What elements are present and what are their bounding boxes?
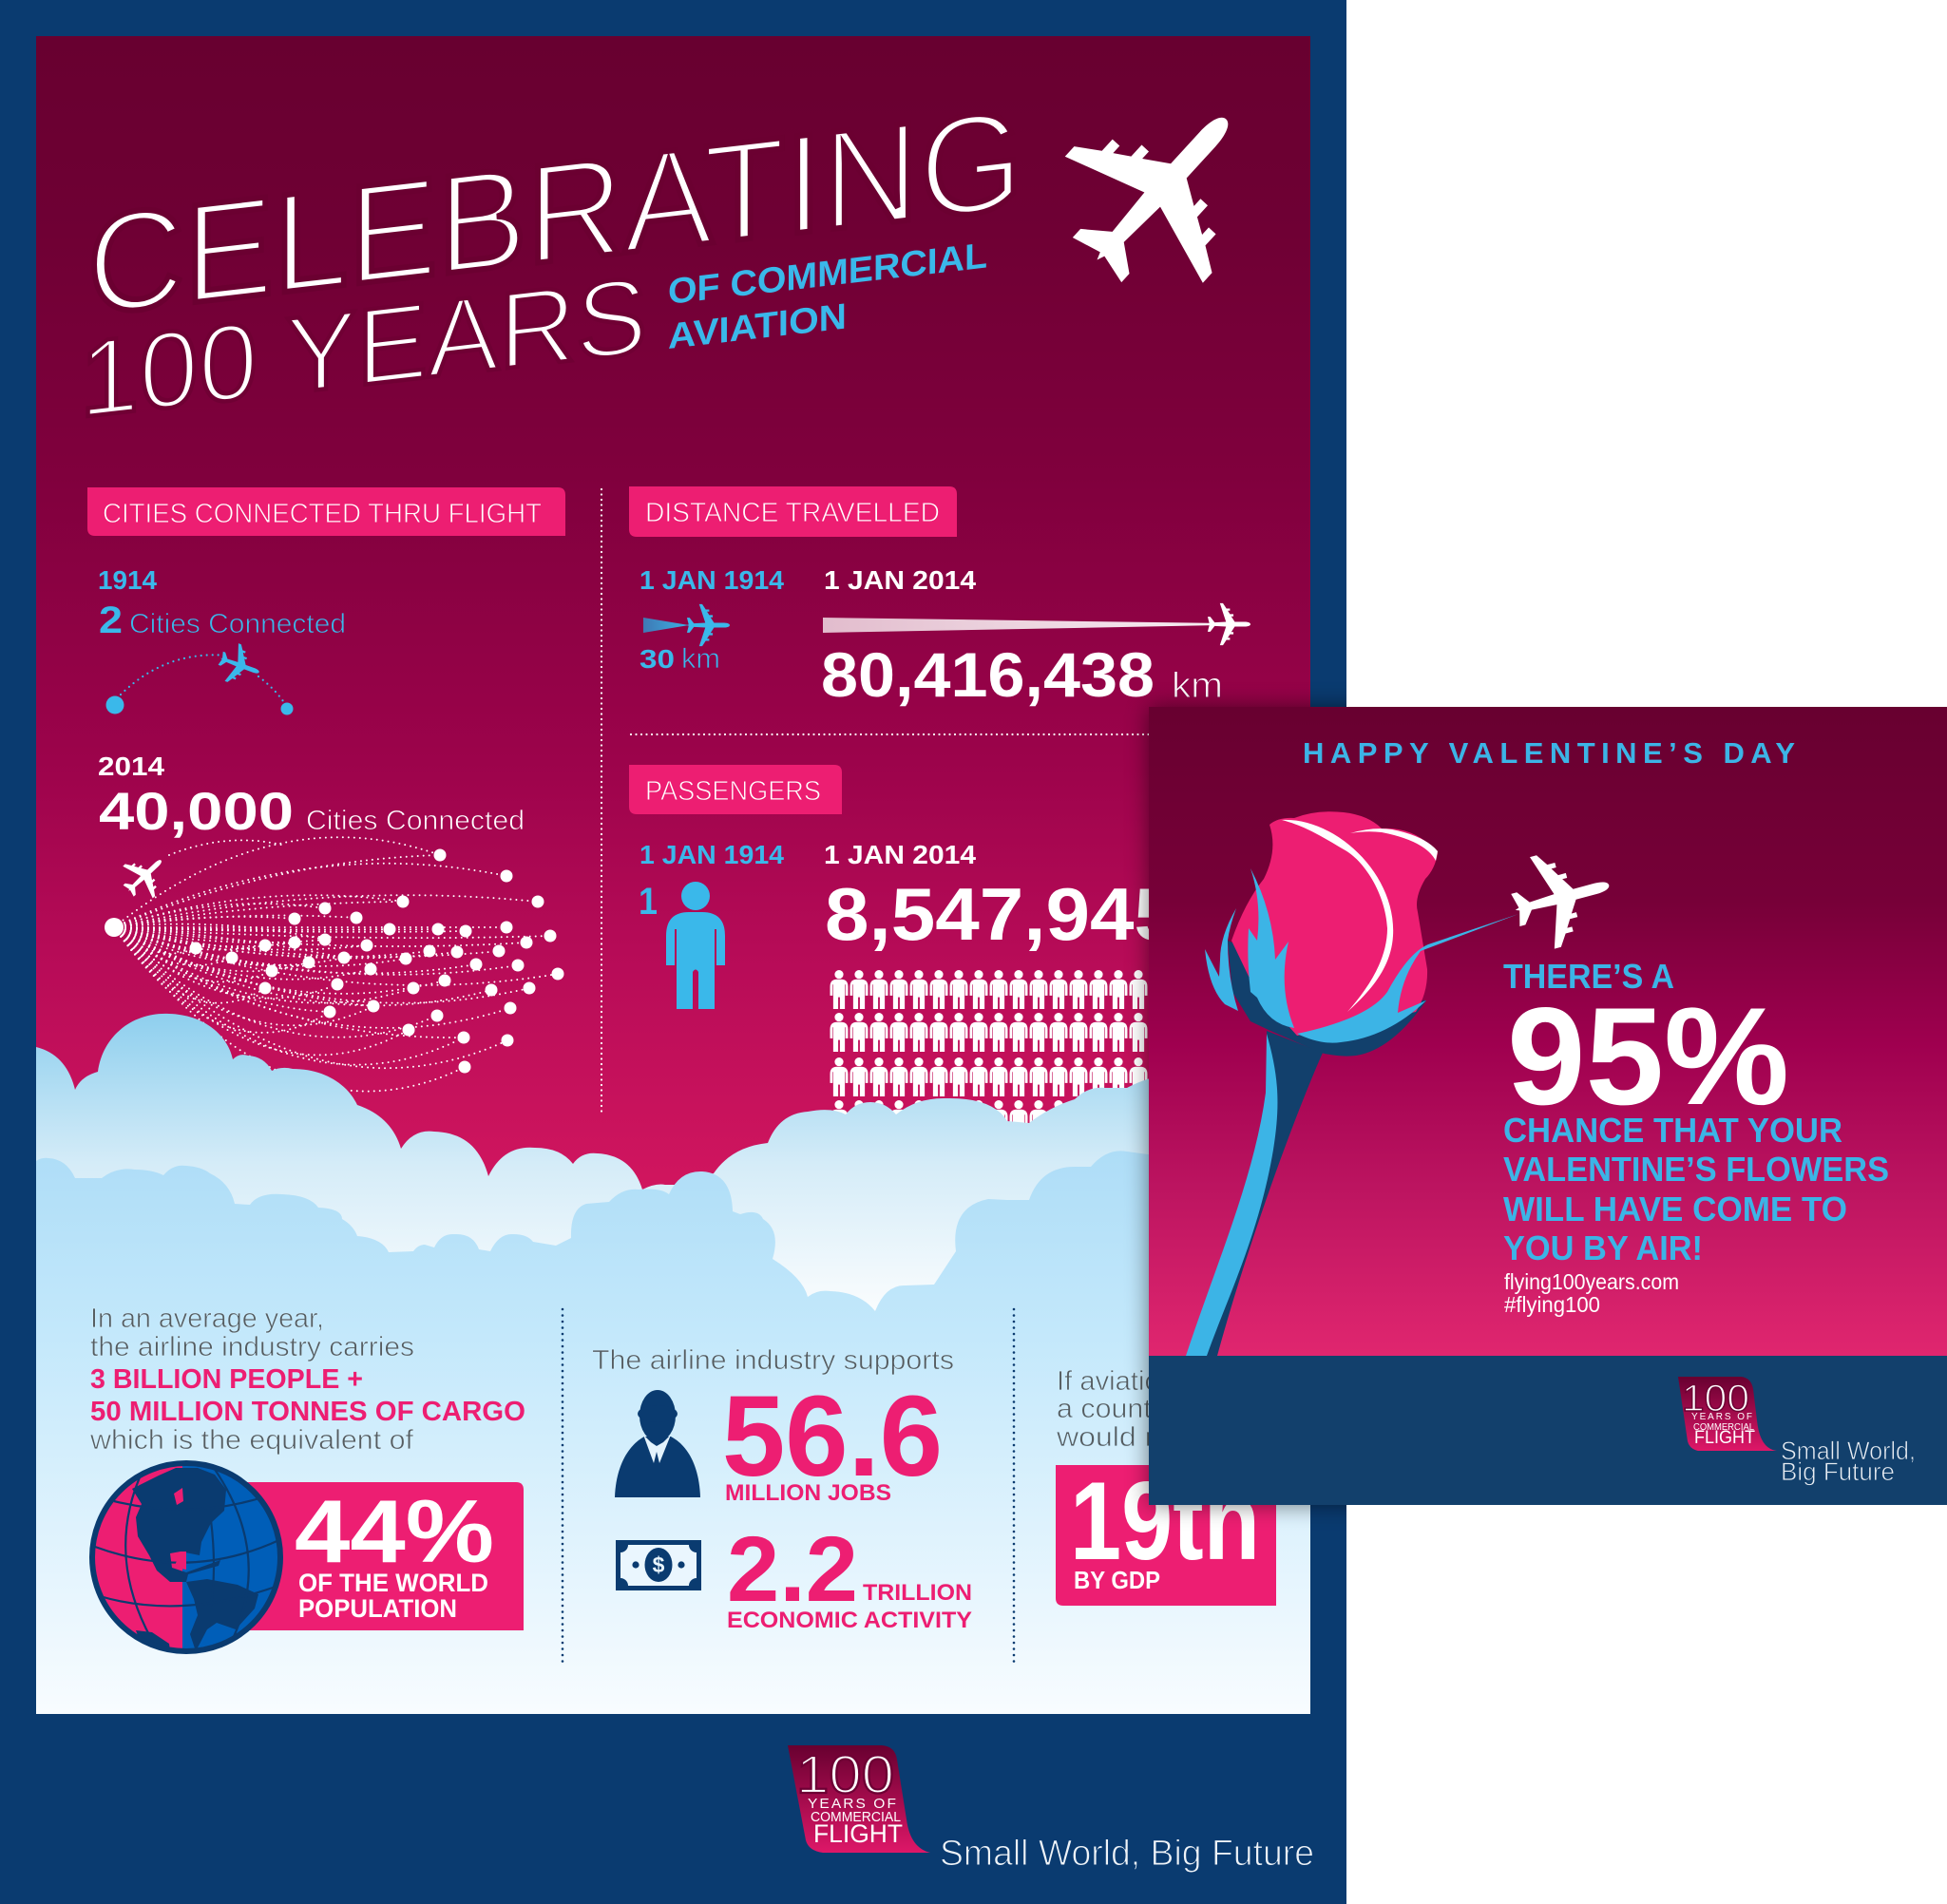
intro text: would rank <box>1056 1422 1205 1453</box>
poster navy background <box>0 0 1346 1904</box>
tagline: Small World, Big Future <box>940 1834 1314 1874</box>
subtitle line 2: AVIATION <box>668 295 847 357</box>
date 1914: 1 JAN 1914 <box>639 565 784 595</box>
panel: cities connected <box>87 487 565 1092</box>
panel: gdp rank <box>1056 1366 1276 1606</box>
icon: banknote <box>616 1540 701 1590</box>
heading: distance travelled <box>629 486 957 537</box>
panel: average year <box>89 1304 525 1658</box>
label: trillion: TRILLION <box>863 1580 972 1606</box>
stat: 80,416,438 km: km <box>1172 666 1223 706</box>
callout: 44 percent: POPULATION <box>298 1594 457 1623</box>
card message: WILL HAVE COME TO <box>1503 1190 1847 1228</box>
label: economic activity: ECONOMIC ACTIVITY <box>727 1608 972 1633</box>
icon: large white plane <box>1028 56 1295 323</box>
logo: 100 years of flight: FLIGHT <box>813 1819 903 1848</box>
icon: business person <box>615 1390 700 1497</box>
card text: there's a: THERE’S A <box>1503 957 1674 996</box>
year 2014: 2014 <box>98 752 164 781</box>
card stat: 95%: 95% <box>1507 979 1789 1133</box>
card message: CHANCE THAT YOUR <box>1503 1111 1842 1150</box>
highlighted figures <box>90 1364 525 1427</box>
stat: 2 cities: 2 <box>99 600 123 641</box>
heading: passengers: PASSENGERS <box>645 776 821 807</box>
intro text: In an average year, <box>90 1304 324 1334</box>
intro text: If aviation was <box>1057 1366 1232 1397</box>
heading: cities connected <box>87 487 565 536</box>
stat: 80,416,438 km: 80,416,438 <box>821 639 1155 710</box>
card links: flying100years.com <box>1504 1269 1679 1294</box>
card message <box>1503 1111 1889 1267</box>
card logo: FLIGHT <box>1694 1428 1755 1448</box>
stat: 2 cities: Cities Connected <box>129 609 346 639</box>
illustration: rose <box>1186 811 1518 1356</box>
logo: 100 years of flight: COMMERCIAL <box>811 1810 901 1825</box>
stat: 8,547,945: 8,547,945 <box>825 872 1178 956</box>
panel: passengers <box>629 765 1178 1139</box>
card logo: 100 <box>1682 1378 1749 1419</box>
intro text: The airline industry supports <box>592 1345 954 1376</box>
card heading: HAPPY VALENTINE’S DAY <box>1303 736 1795 770</box>
stat: 40,000 cities: Cities Connected <box>306 806 525 836</box>
icon: short flight <box>643 604 730 646</box>
stat: 30 km <box>639 643 720 675</box>
logo: 100 years of flight <box>788 1744 930 1853</box>
highlighted figures: 50 MILLION TONNES OF CARGO <box>90 1397 525 1427</box>
route network <box>105 837 564 1092</box>
callout: 19th: BY GDP <box>1074 1566 1160 1594</box>
callout: 44 percent: 44% <box>295 1481 494 1581</box>
panel: distance travelled <box>629 486 1250 710</box>
date 2014: 1 JAN 2014 <box>824 565 976 595</box>
logo: 100 years of flight: YEARS OF <box>808 1796 898 1812</box>
date 1914: 1 JAN 1914 <box>639 840 784 869</box>
stat: 56.6: 56.6 <box>722 1371 943 1500</box>
panel: main gradient <box>36 36 1310 1271</box>
card logo: YEARS OF <box>1691 1412 1752 1422</box>
subtitle line 1: OF COMMERCIAL <box>668 235 987 313</box>
card tagline: Big Future <box>1781 1457 1895 1486</box>
heading: cities connected: CITIES CONNECTED THRU FLIGHT <box>103 499 542 529</box>
intro text <box>1056 1366 1232 1453</box>
card shadow <box>1149 707 1947 1505</box>
title line: 100 years: 100 YEARS <box>80 255 647 441</box>
card logo: COMMERCIAL <box>1693 1422 1754 1433</box>
card tagline <box>1781 1437 1916 1486</box>
stat: 2 cities <box>99 600 346 641</box>
callout: 44 percent: OF THE WORLD <box>298 1569 488 1597</box>
back clouds <box>36 1014 1310 1714</box>
card logo <box>1678 1377 1777 1451</box>
people grid <box>830 970 1147 1139</box>
card links <box>1504 1269 1679 1317</box>
intro text <box>90 1304 414 1362</box>
icon: card plane <box>1503 839 1621 956</box>
equivalent text: which is the equivalent of <box>89 1425 414 1456</box>
icon: blue person <box>666 882 725 1009</box>
date 2014: 1 JAN 2014 <box>824 840 976 869</box>
panel: industry supports <box>592 1345 972 1633</box>
title line: celebrating: CELEBRATING <box>87 81 1023 345</box>
stat: 2.2: 2.2 <box>727 1517 858 1621</box>
stat: 30 km: km <box>681 643 720 675</box>
front clouds <box>36 1151 1310 1714</box>
heading: passengers <box>629 765 842 814</box>
card message: YOU BY AIR! <box>1503 1228 1703 1267</box>
icon: globe <box>90 1461 283 1658</box>
label: million jobs: MILLION JOBS <box>725 1480 891 1506</box>
highlighted figures: 3 BILLION PEOPLE + <box>90 1364 363 1395</box>
logo: 100 years of flight: 100 <box>796 1744 894 1805</box>
route 1914 <box>106 639 293 714</box>
card message: VALENTINE’S FLOWERS <box>1503 1150 1889 1189</box>
callout: 44 percent <box>219 1481 524 1630</box>
callout: 19th: 19th <box>1070 1458 1260 1583</box>
stat: 1 passenger: 1 <box>639 881 658 923</box>
year 1914: 1914 <box>98 565 157 595</box>
card tagline: Small World, <box>1781 1437 1916 1465</box>
icon: banknote: $ <box>653 1552 665 1577</box>
stat: 40,000 cities: 40,000 <box>99 781 294 841</box>
card links: #flying100 <box>1504 1292 1600 1317</box>
title <box>80 81 1023 441</box>
heading: distance travelled: DISTANCE TRAVELLED <box>645 498 940 528</box>
stat: 30 km: 30 <box>639 644 675 674</box>
icon: long flight <box>823 603 1250 645</box>
intro text: a country, it <box>1057 1394 1204 1424</box>
intro text: the airline industry carries <box>90 1332 414 1362</box>
stat: 40,000 cities <box>99 781 525 841</box>
panel: valentine card <box>1149 707 1947 1505</box>
